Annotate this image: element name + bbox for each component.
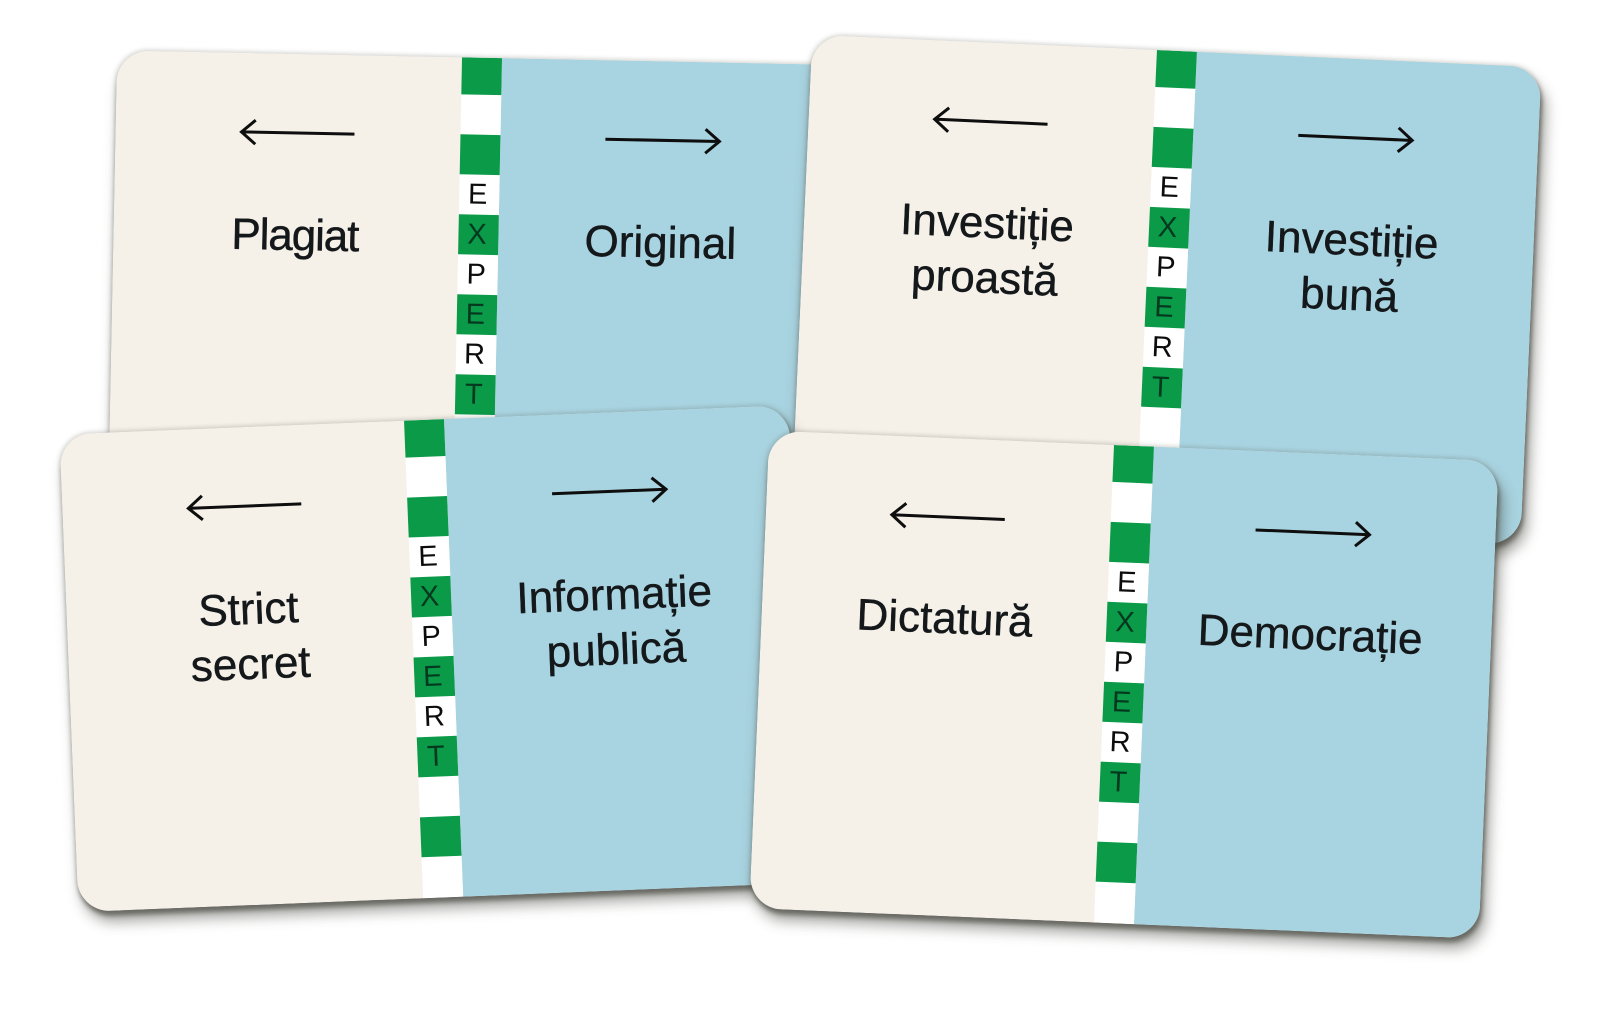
badge: EXPERT (1149, 171, 1181, 404)
arrow: right (605, 127, 720, 154)
badge: EXPERT: E (1159, 171, 1180, 204)
label: Plagiat: Plagiat (231, 210, 360, 261)
badge: EXPERT: X (1115, 606, 1135, 639)
card: Dictatură / Democrație (748, 429, 1505, 950)
badge: EXPERT: P (421, 620, 442, 653)
arrow: left (241, 120, 355, 146)
badge: EXPERT: T (1151, 371, 1170, 404)
card: Plagiat / Original (104, 48, 812, 434)
label: Original: Original (584, 217, 737, 269)
badge: EXPERT: T (465, 378, 483, 411)
badge: EXPERT: X (419, 580, 440, 613)
badge: EXPERT: R (1109, 726, 1131, 759)
arrow: left (188, 492, 302, 520)
card: Investiție proastă / Investiție bună (790, 34, 1548, 556)
arrow: right (1298, 123, 1413, 152)
arrow: right (1255, 518, 1370, 547)
label: Investiție proastă: proastă (910, 250, 1060, 306)
badge: EXPERT (417, 540, 447, 773)
label: Strict secret: secret (190, 638, 312, 691)
arrow: left (891, 503, 1005, 531)
badge: EXPERT: R (423, 700, 446, 733)
badge: EXPERT: R (464, 338, 485, 371)
arrow: right (552, 477, 666, 506)
badge: EXPERT: X (467, 218, 487, 251)
card: Strict secret / Informație publică (58, 404, 814, 923)
badge: EXPERT: E (418, 540, 438, 573)
badge: EXPERT: R (1151, 331, 1173, 364)
label: Strict secret: Strict (197, 583, 300, 636)
badge: EXPERT (1107, 566, 1138, 799)
badge: EXPERT: P (1155, 251, 1176, 284)
badge: EXPERT: P (1113, 646, 1134, 679)
badge: EXPERT: T (1109, 766, 1128, 799)
label: Informație publică: publică (546, 623, 688, 677)
badge: EXPERT: E (1116, 566, 1137, 599)
badge: EXPERT: P (466, 258, 486, 291)
label: Democrație: Democrație (1197, 606, 1424, 664)
badge: EXPERT (463, 178, 489, 411)
label: Investiție bună: bună (1299, 269, 1400, 322)
badge: EXPERT: T (427, 740, 446, 773)
arrow: left (934, 107, 1048, 136)
label: Informație publică: Informație (515, 566, 713, 623)
badge: EXPERT: E (1111, 686, 1132, 719)
badge: EXPERT: E (468, 178, 488, 211)
badge: EXPERT: E (1154, 291, 1174, 324)
badge: EXPERT: E (465, 298, 485, 331)
badge: EXPERT: E (423, 660, 443, 693)
label: Dictatură: Dictatură (856, 590, 1034, 647)
label: Investiție proastă: Investiție (899, 195, 1075, 251)
label: Investiție bună: Investiție (1264, 212, 1440, 269)
badge: EXPERT: X (1157, 211, 1178, 244)
